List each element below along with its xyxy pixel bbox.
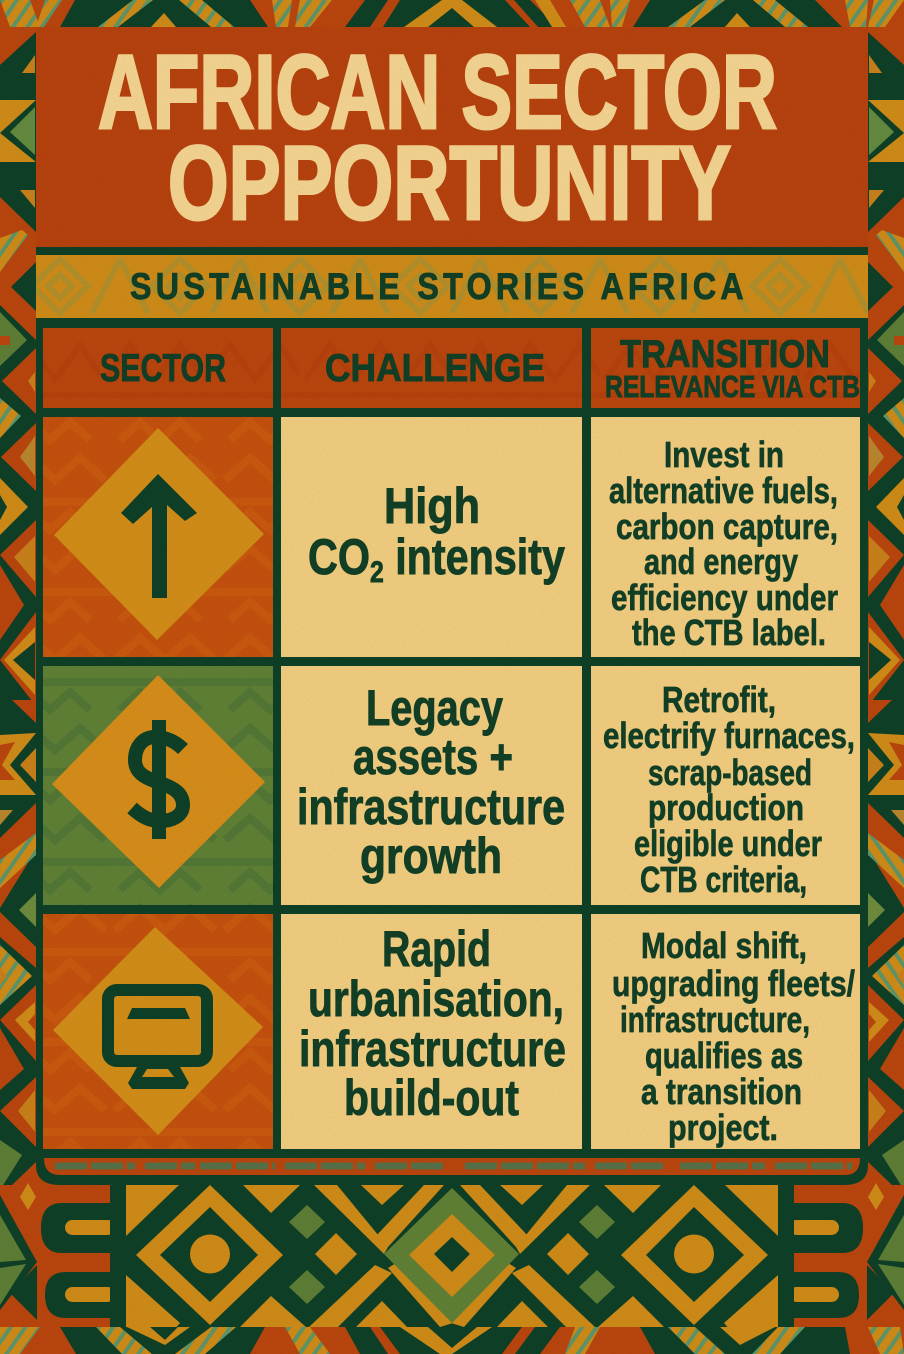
bottom pattern band xyxy=(0,1183,904,1340)
title xyxy=(98,34,777,242)
row 1 challenge: CO xyxy=(308,529,383,585)
row 1 sector cell xyxy=(43,417,273,657)
strip under table xyxy=(44,1158,860,1175)
row 1 challenge: intensity xyxy=(384,529,565,585)
row 1 challenge xyxy=(281,417,582,657)
band end left xyxy=(0,1183,130,1327)
row 2 challenge: Legacy xyxy=(366,680,503,736)
header: sector: SECTOR xyxy=(100,347,226,390)
row 3 challenge: build-out xyxy=(344,1070,519,1126)
header: sector xyxy=(43,328,273,408)
icon: dollar in diamond xyxy=(52,675,265,888)
row 2 relevance: production xyxy=(648,787,804,828)
left decorative border xyxy=(0,27,36,1190)
frame curved bottom xyxy=(36,1150,868,1185)
row 1 challenge: High xyxy=(384,478,480,534)
row 3 relevance: a transition xyxy=(641,1071,802,1112)
subtitle band xyxy=(36,247,868,327)
row 1 relevance: Invest in xyxy=(664,434,784,475)
row 1 relevance: efficiency under xyxy=(611,577,838,618)
row 3 relevance: infrastructure, xyxy=(620,999,810,1040)
row 2 relevance: electrify furnaces, xyxy=(603,715,855,756)
row 1 relevance: the CTB label. xyxy=(632,612,826,653)
row 1 relevance: carbon capture, xyxy=(616,506,838,547)
row 2 challenge xyxy=(281,666,582,905)
row 3 relevance xyxy=(591,914,860,1149)
icon: monitor in diamond xyxy=(53,927,263,1135)
row 1 relevance: and energy xyxy=(644,541,798,582)
row 3 challenge: infrastructure xyxy=(299,1021,566,1077)
row 2 challenge: infrastructure xyxy=(297,779,565,835)
row 2 challenge: growth xyxy=(360,828,502,884)
row 2 relevance xyxy=(591,666,860,905)
band right half xyxy=(451,1185,778,1340)
subtitle band: SUSTAINABLE STORIES AFRICA xyxy=(130,266,748,307)
row 2 relevance: Retrofit, xyxy=(662,679,776,720)
icon: up arrow in diamond xyxy=(54,428,264,640)
title panel xyxy=(36,27,868,247)
row 1 relevance xyxy=(591,417,860,657)
header: challenge xyxy=(281,328,582,408)
bottom decorative border xyxy=(0,1327,904,1354)
band end right xyxy=(774,1183,904,1327)
centre diamond xyxy=(384,1188,519,1323)
row 3 relevance: project. xyxy=(668,1107,778,1148)
row 3 sector cell xyxy=(43,914,273,1149)
row 1 challenge: 2 xyxy=(370,556,384,589)
header: transition relevance xyxy=(591,328,860,408)
row 1 relevance: alternative fuels, xyxy=(609,470,838,511)
row 2 relevance: scrap-based xyxy=(648,752,812,793)
row 2 relevance: eligible under xyxy=(634,823,822,864)
header: challenge: CHALLENGE xyxy=(325,347,545,390)
header: transition relevance: TRANSITION xyxy=(620,333,830,376)
band left half xyxy=(126,1185,453,1340)
table frame xyxy=(36,318,868,1185)
row 3 relevance: qualifies as xyxy=(645,1035,803,1076)
row 3 relevance: Modal shift, xyxy=(641,925,807,966)
row 3 relevance: upgrading fleets/ xyxy=(612,963,855,1004)
row 2 relevance: CTB criteria, xyxy=(640,859,807,900)
row 2 challenge: assets + xyxy=(353,729,513,785)
row 2 sector cell xyxy=(43,666,273,905)
top decorative border xyxy=(0,0,904,27)
row 3 challenge xyxy=(281,914,582,1149)
right decorative border xyxy=(868,27,904,1190)
title: OPPORTUNITY xyxy=(168,125,731,242)
row 3 challenge: urbanisation, xyxy=(308,971,564,1027)
row 3 challenge: Rapid xyxy=(382,921,491,977)
